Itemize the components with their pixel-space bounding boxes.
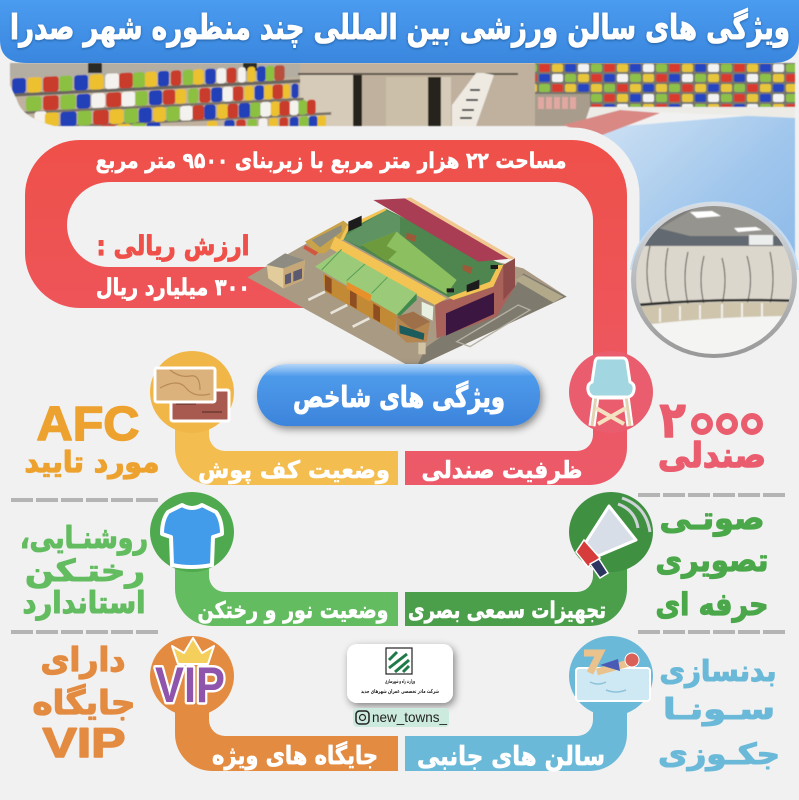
side text: audio visual: صوتـی xyxy=(660,501,764,537)
icon: VIP badge: VIP xyxy=(155,657,225,713)
canopy xyxy=(315,250,417,315)
side text: audio visual xyxy=(656,501,768,623)
roof xyxy=(373,198,515,262)
side text: AFC approval: AFC xyxy=(36,398,140,451)
side text: side facilities xyxy=(658,654,780,771)
photo: seats and concrete wall xyxy=(10,62,536,127)
button: key features: ویژگی های شاخص xyxy=(293,380,505,414)
side text: has VIP: دارای xyxy=(40,640,126,679)
instagram handle: new_towns_ xyxy=(372,709,447,725)
panel: arena photo strip xyxy=(10,62,796,254)
label: audio visual: تجهیزات سمعی بصری xyxy=(408,598,606,624)
yellow route band xyxy=(175,410,398,485)
title bar xyxy=(0,0,799,63)
side text: side facilities: جکـوزی xyxy=(658,737,780,771)
photo: floor and far seats xyxy=(535,63,795,290)
bowl xyxy=(342,208,503,300)
side text: has VIP xyxy=(32,640,136,766)
side text: seats count: صندلی xyxy=(658,436,766,476)
side text: lighting standard: روشنـایی، xyxy=(20,521,148,556)
side text: audio visual: تصویری xyxy=(656,543,768,579)
blue band xyxy=(405,695,627,771)
instagram handle xyxy=(353,708,449,727)
side text: lighting standard: رختـکن xyxy=(25,554,145,589)
halo behind red path xyxy=(420,140,627,360)
side text: has VIP: جایگاه xyxy=(32,683,136,722)
orange band xyxy=(175,695,398,771)
yellow band xyxy=(330,237,447,305)
divider lines xyxy=(11,495,786,632)
green left band xyxy=(175,550,398,626)
label: side halls: سالن های جانبی xyxy=(417,742,605,772)
illustration: stadium xyxy=(247,197,567,368)
label: VIP seats: جایگاه های ویژه xyxy=(212,741,378,771)
side text: AFC approval: مورد تایید xyxy=(24,445,160,479)
value heading: ارزش ریالی : xyxy=(96,231,250,262)
icon: ministry logo xyxy=(386,648,412,674)
side text: AFC approval xyxy=(24,398,160,479)
side text: lighting standard xyxy=(20,521,148,621)
label: seat capacity: ظرفیت صندلی xyxy=(422,456,582,484)
ministry name: شرکت مادر تخصصی عمران شهرهای جدید xyxy=(361,688,439,695)
logo card xyxy=(347,644,453,703)
stadium walls xyxy=(435,258,515,338)
value amount: ۳۰۰ میلیارد ریال xyxy=(96,275,250,301)
side text: lighting standard: استاندارد xyxy=(22,586,146,621)
icon: VIP badge xyxy=(150,636,234,716)
button: key features xyxy=(257,364,540,426)
side text: has VIP: VIP xyxy=(42,719,126,766)
side text: seats count xyxy=(658,391,766,476)
label: flooring: وضعیت کف پوش xyxy=(198,456,390,484)
side text: side facilities: سـونـا xyxy=(663,692,775,726)
green right band xyxy=(405,550,627,626)
ministry name xyxy=(361,679,439,695)
area text: مساحت ۲۲ هزار متر مربع با زیربنای ۹۵۰۰ متر مربع xyxy=(96,149,566,174)
side text: seats count: ۲۰۰۰ xyxy=(660,391,764,449)
icon: swimmer xyxy=(569,636,653,716)
icon: t-shirt xyxy=(150,492,234,572)
side text: side facilities: بدنسازی xyxy=(660,654,776,688)
icon: megaphone xyxy=(569,492,653,578)
icon: floor planks xyxy=(150,351,234,433)
small annex building xyxy=(267,253,305,288)
side text: audio visual: حرفه ای xyxy=(656,587,768,623)
label: light and locker: وضعیت نور و رختکن xyxy=(198,598,388,624)
low front building xyxy=(397,312,430,343)
ministry name: وزارت راه و شهرسازی xyxy=(385,679,415,685)
panel: red route band xyxy=(25,140,627,485)
icon: chair xyxy=(569,351,653,433)
round photo: locker room xyxy=(630,200,799,360)
